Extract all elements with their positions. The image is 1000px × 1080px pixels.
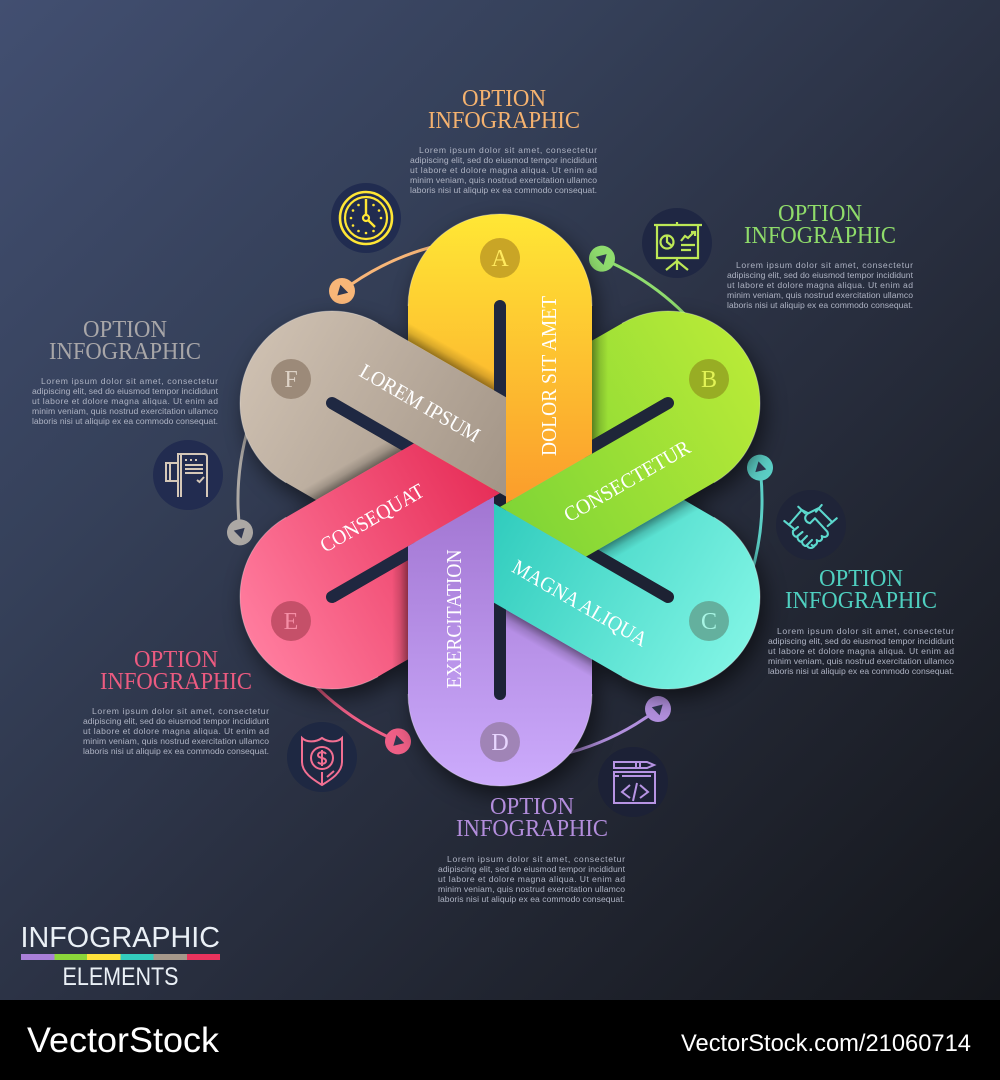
text block F: INFOGRAPHIC (49, 339, 201, 365)
letter badge B (689, 359, 729, 399)
band C: teal cap and front leg (451, 419, 794, 723)
icon: clock (331, 183, 401, 253)
text block B: Lorem ipsum dolor sit amet, consectetur (736, 260, 913, 270)
text block D: INFOGRAPHIC (456, 816, 608, 842)
band label: dolor sit amet: DOLOR SIT AMET (537, 296, 561, 456)
band D: purple cap and front leg (408, 497, 592, 786)
letter badge E (271, 601, 311, 641)
band E: red cap and front leg (206, 419, 549, 723)
letter badge A: A (491, 246, 509, 272)
text block D: adipiscing elit, sed do eiusmod tempor incididunt (438, 864, 626, 874)
text block E: minim veniam, quis nostrud exercitation ullamco (83, 736, 269, 746)
band label: consequat: CONSEQUAT (316, 479, 428, 557)
text block D: ut labore et dolore magna aliqua. Ut enim ad (438, 874, 625, 884)
text block C (768, 566, 955, 676)
band B: green cap and front leg (451, 277, 794, 581)
flower drop shadow (211, 223, 799, 795)
letter badge F: F (284, 367, 298, 393)
letter badge B: B (701, 367, 717, 393)
letter badge C: C (701, 609, 717, 635)
logo: infographic elements (20, 922, 220, 991)
band label: lorem ipsum: LOREM IPSUM (356, 359, 485, 447)
arc connector B with marker (584, 224, 691, 350)
icon: presentation board (642, 208, 712, 278)
text block B: laboris nisi ut aliquip ex ea commodo consequat. (727, 300, 913, 310)
text block F: OPTION (83, 317, 167, 343)
letter badge D: D (491, 730, 509, 756)
text block F (32, 317, 219, 426)
band label: consectetur: CONSECTETUR (560, 435, 694, 527)
text block A: adipiscing elit, sed do eiusmod tempor incididunt (410, 155, 598, 165)
letter badge F (271, 359, 311, 399)
icon: code window (598, 747, 668, 817)
arc connector F with marker (194, 424, 300, 550)
text block B: INFOGRAPHIC (744, 223, 896, 249)
text block B: ut labore et dolore magna aliqua. Ut enim ad (727, 280, 913, 290)
text block E: adipiscing elit, sed do eiusmod tempor incididunt (83, 716, 270, 726)
text block E: INFOGRAPHIC (100, 669, 252, 695)
text block A: Lorem ipsum dolor sit amet, consectetur (419, 145, 597, 155)
icon: handshake (776, 490, 846, 560)
text block B: OPTION (778, 201, 862, 227)
text block A (410, 86, 598, 195)
text block C: OPTION (819, 566, 903, 592)
text block E (83, 647, 270, 756)
text block A: minim veniam, quis nostrud exercitation ullamco (410, 175, 597, 185)
text block D: Lorem ipsum dolor sit amet, consectetur (447, 854, 625, 864)
text block B: minim veniam, quis nostrud exercitation ullamco (727, 290, 913, 300)
text block A: OPTION (462, 86, 546, 112)
text block E: laboris nisi ut aliquip ex ea commodo consequat. (83, 746, 269, 756)
front leg cast shadows on neighbouring bands (300, 322, 700, 678)
letter badge E: E (284, 609, 298, 635)
text block E: ut labore et dolore magna aliqua. Ut enim ad (83, 726, 269, 736)
text block F: adipiscing elit, sed do eiusmod tempor incididunt (32, 386, 219, 396)
text block F: laboris nisi ut aliquip ex ea commodo consequat. (32, 416, 218, 426)
text block C: adipiscing elit, sed do eiusmod tempor incididunt (768, 636, 955, 646)
watermark bar: VectorStock (27, 1021, 220, 1060)
icon: money shield (287, 722, 357, 792)
letter badge A (480, 238, 520, 278)
arc connector D with marker (560, 696, 671, 755)
text block B: adipiscing elit, sed do eiusmod tempor incididunt (727, 270, 914, 280)
text block F: ut labore et dolore magna aliqua. Ut enim ad (32, 396, 218, 406)
slots between band legs (324, 300, 676, 700)
text block E: OPTION (134, 647, 218, 673)
text block E: Lorem ipsum dolor sit amet, consectetur (92, 706, 269, 716)
text block D (438, 794, 626, 904)
text block C: ut labore et dolore magna aliqua. Ut enim ad (768, 646, 954, 656)
band F: taupe cap and front leg (206, 277, 549, 581)
text block A: ut labore et dolore magna aliqua. Ut enim ad (410, 165, 597, 175)
arc connector A with marker (329, 245, 440, 304)
icon: document with check (153, 440, 223, 510)
text block A: INFOGRAPHIC (428, 108, 580, 134)
text block C: laboris nisi ut aliquip ex ea commodo consequat. (768, 666, 954, 676)
text block C: INFOGRAPHIC (785, 588, 937, 614)
band label: magna aliqua: MAGNA ALIQUA (508, 555, 652, 652)
watermark bar: VectorStock.com/21060714 (681, 1030, 971, 1057)
text block D: laboris nisi ut aliquip ex ea commodo consequat. (438, 894, 625, 904)
arc connector C with marker (700, 450, 806, 576)
band label: exercitation: EXERCITATION (442, 550, 466, 688)
text block B (727, 201, 914, 310)
back legs of all six bands (284, 304, 716, 696)
text block C: Lorem ipsum dolor sit amet, consectetur (777, 626, 954, 636)
logo: infographic elements: INFOGRAPHIC (20, 922, 220, 954)
text block F: Lorem ipsum dolor sit amet, consectetur (41, 376, 218, 386)
text block D: minim veniam, quis nostrud exercitation ullamco (438, 884, 625, 894)
watermark bar (0, 1000, 1000, 1080)
text block D: OPTION (490, 794, 574, 820)
text block C: minim veniam, quis nostrud exercitation ullamco (768, 656, 954, 666)
central hexagon gap (492, 492, 508, 508)
band A: yellow cap and front leg (408, 214, 592, 503)
letter badge D (480, 722, 520, 762)
logo: infographic elements: ELEMENTS (62, 963, 178, 991)
text block F: minim veniam, quis nostrud exercitation ullamco (32, 406, 218, 416)
text block A: laboris nisi ut aliquip ex ea commodo consequat. (410, 185, 597, 195)
letter badge C (689, 601, 729, 641)
arc connector E with marker (309, 650, 416, 776)
